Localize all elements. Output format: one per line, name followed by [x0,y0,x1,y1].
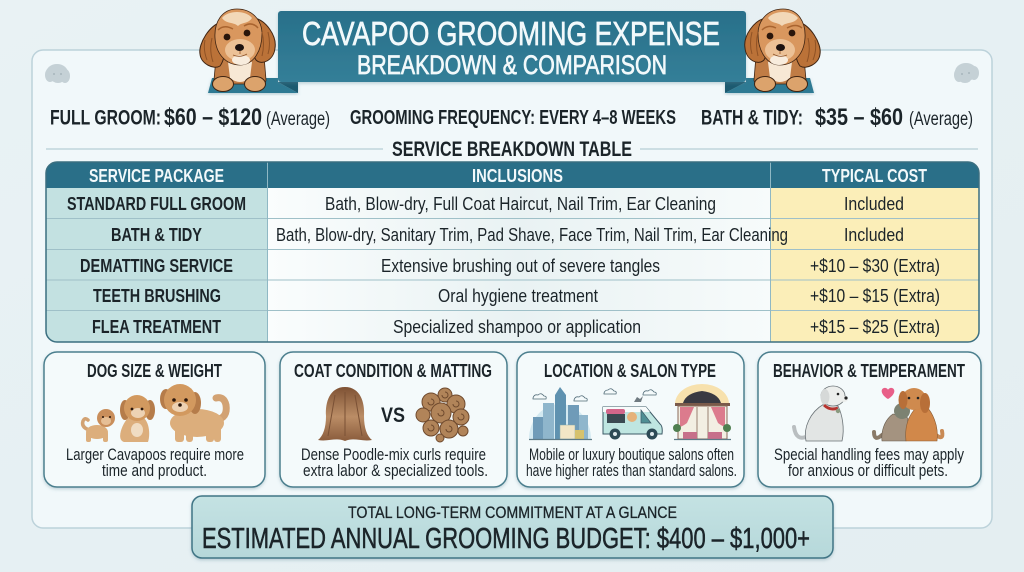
card description: extra labor & specialized tools. [303,462,488,480]
card description: Larger Cavapoos require more [66,446,244,464]
card description [301,446,488,480]
row: flea treatment: FLEA TREATMENT [92,316,222,337]
ribbon tail right [725,78,814,93]
row: flea treatment [92,316,940,337]
panel: coat condition and matting [280,352,507,487]
row: teeth brushing: Oral hygiene treatment [438,285,598,306]
stat: bath and tidy [701,104,973,131]
icon: mobile grooming van [603,389,662,440]
stat: full groom: $60 – $120 [164,104,262,131]
icon: anxious white dog [794,386,848,441]
icon: boutique salon [673,384,731,440]
row: teeth brushing: TEETH BRUSHING [93,285,221,306]
ribbon tail left [208,78,298,93]
row: standard full groom: Bath, Blow-dry, Full Coat Haircut, Nail Trim, Ear Cleaning [325,193,716,214]
icon: cavapoo puppy left [200,9,275,92]
card heading: COAT CONDITION & MATTING [294,360,492,381]
row: standard full groom: Included [844,193,904,214]
table header row [89,165,928,186]
card description [774,446,965,480]
card description: Special handling fees may apply [774,446,965,464]
table: service breakdown [46,162,979,342]
row: flea treatment: +$15 – $25 (Extra) [810,316,940,337]
stat: bath and tidy: (Average) [909,109,973,130]
row: bath and tidy: Included [844,224,904,245]
card description: Dense Poodle-mix curls require [301,446,486,464]
icon: two cuddling dogs with heart [874,388,942,441]
panel: main content card [32,50,992,528]
banner body [278,11,746,82]
icon: straight hair [318,387,372,441]
stat: full groom [50,104,330,131]
title line 2: BREAKDOWN & COMPARISON [357,50,667,80]
row: teeth brushing [93,285,940,306]
row: flea treatment: Specialized shampoo or application [393,316,641,337]
icon: cavapoo puppy right [745,9,820,92]
card heading: DOG SIZE & WEIGHT [87,360,223,381]
row: dematting service [80,255,940,276]
stat: full groom: (Average) [266,109,330,130]
icon: faint dog watermark left [45,64,70,83]
panel: behavior and temperament [758,352,981,487]
panel: location and salon type [517,352,744,487]
card description: time and product. [102,462,207,480]
card description: for anxious or difficult pets. [788,462,948,480]
callout subheading: TOTAL LONG-TERM COMMITMENT AT A GLANCE [348,503,677,522]
card description [526,446,737,480]
card heading: LOCATION & SALON TYPE [544,360,716,381]
row: bath and tidy: Bath, Blow-dry, Sanitary Trim, Pad Shave, Face Trim, Nail Trim, Ear Cleaning [276,224,788,245]
title banner [208,11,814,93]
row: dematting service: Extensive brushing out of severe tangles [381,255,660,276]
heading: service breakdown table: SERVICE BREAKDOWN TABLE [392,138,632,161]
card description [66,446,244,480]
panel: dog size and weight [44,352,265,487]
callout figure: ESTIMATED ANNUAL GROOMING BUDGET: $400 – $1,000+ [202,523,810,555]
table header row: INCLUSIONS [472,165,563,186]
icon: three dogs of increasing size [83,384,226,442]
text: versus: VS [381,404,405,427]
stat: bath and tidy: BATH & TIDY: [701,106,803,130]
row: bath and tidy: BATH & TIDY [111,224,203,245]
row: dematting service: +$10 – $30 (Extra) [810,255,940,276]
card description: Mobile or luxury boutique salons often [529,446,734,464]
card description: have higher rates than standard salons. [526,462,737,480]
row: standard full groom: STANDARD FULL GROOM [67,193,246,214]
callout: annual grooming budget [192,496,833,558]
icon: faint dog watermark right [954,63,979,83]
table header row: TYPICAL COST [822,165,928,186]
title line 1: CAVAPOO GROOMING EXPENSE [302,16,720,53]
stat: grooming frequency: GROOMING FREQUENCY: EVERY 4–8 WEEKS [350,106,676,129]
icon: matted curls [416,388,469,442]
icon: city skyline [529,387,592,440]
row: standard full groom [67,193,904,214]
table header row: SERVICE PACKAGE [89,165,224,186]
stat: bath and tidy: $35 – $60 [815,104,903,131]
stat: full groom: FULL GROOM: [50,106,161,130]
row: dematting service: DEMATTING SERVICE [80,255,233,276]
row: teeth brushing: +$10 – $15 (Extra) [810,285,940,306]
divider lines [46,148,978,150]
